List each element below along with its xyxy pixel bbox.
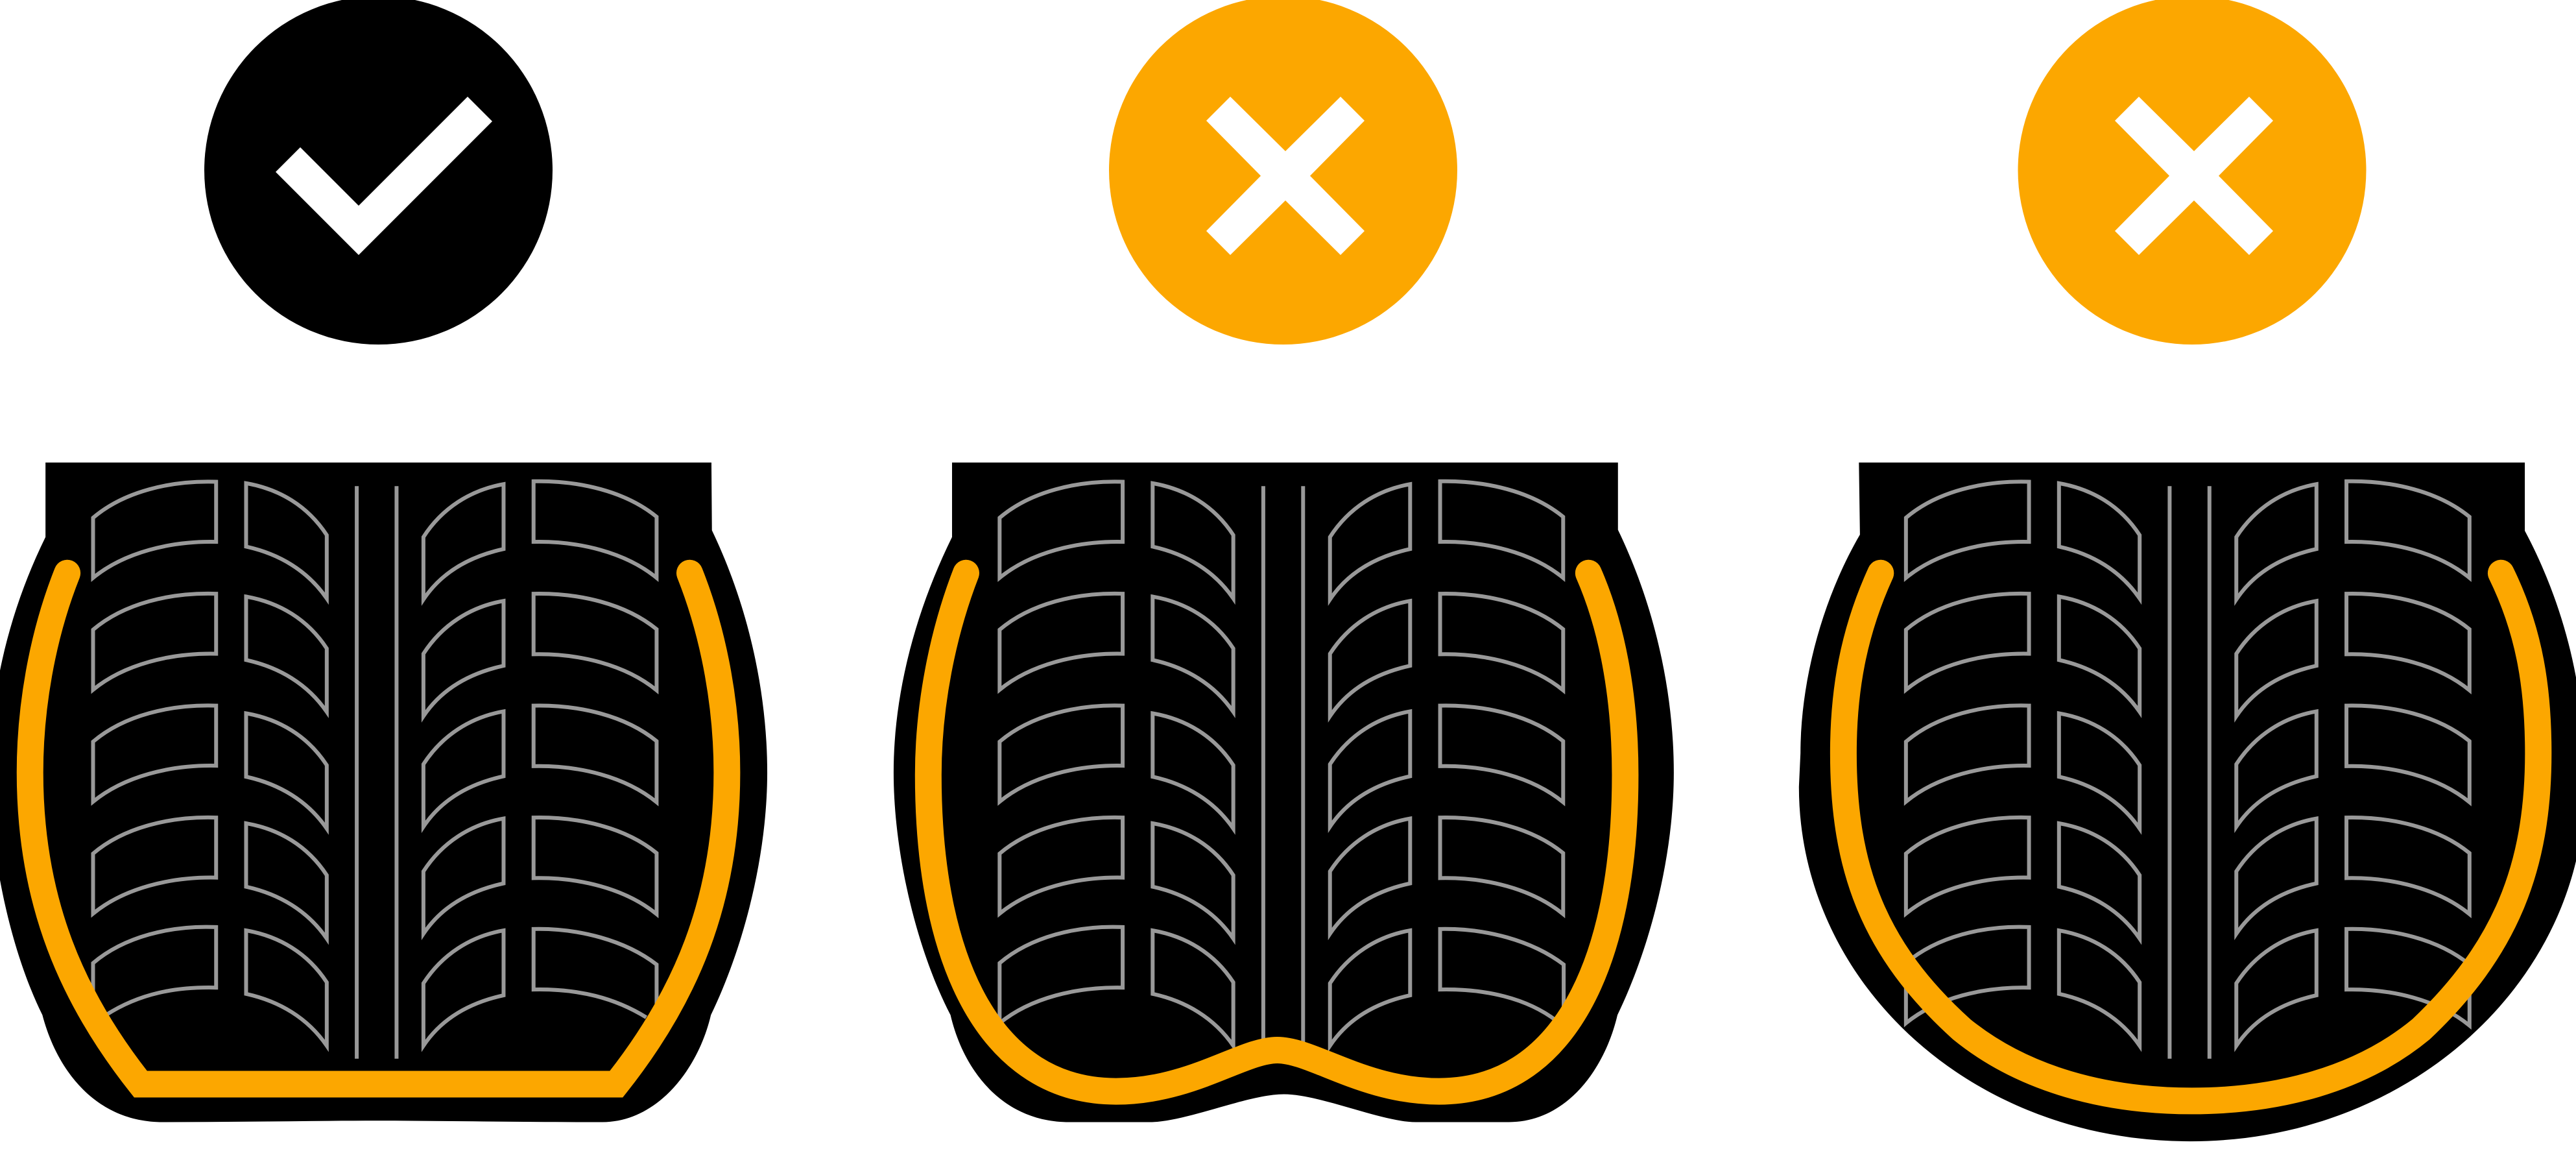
status icon: incorrect (orange circle with cross): [2018, 0, 2366, 345]
tyre cross-section: under-inflated, centre lifted: [894, 463, 1674, 1122]
tyre cross-section: over-inflated, rounded contact: [1799, 463, 2576, 1141]
status icon: incorrect (orange circle with cross): [1109, 0, 1457, 345]
status icon: correct (black circle with check mark): [204, 0, 553, 345]
tyre cross-section: correct pressure, flat contact: [0, 463, 767, 1122]
